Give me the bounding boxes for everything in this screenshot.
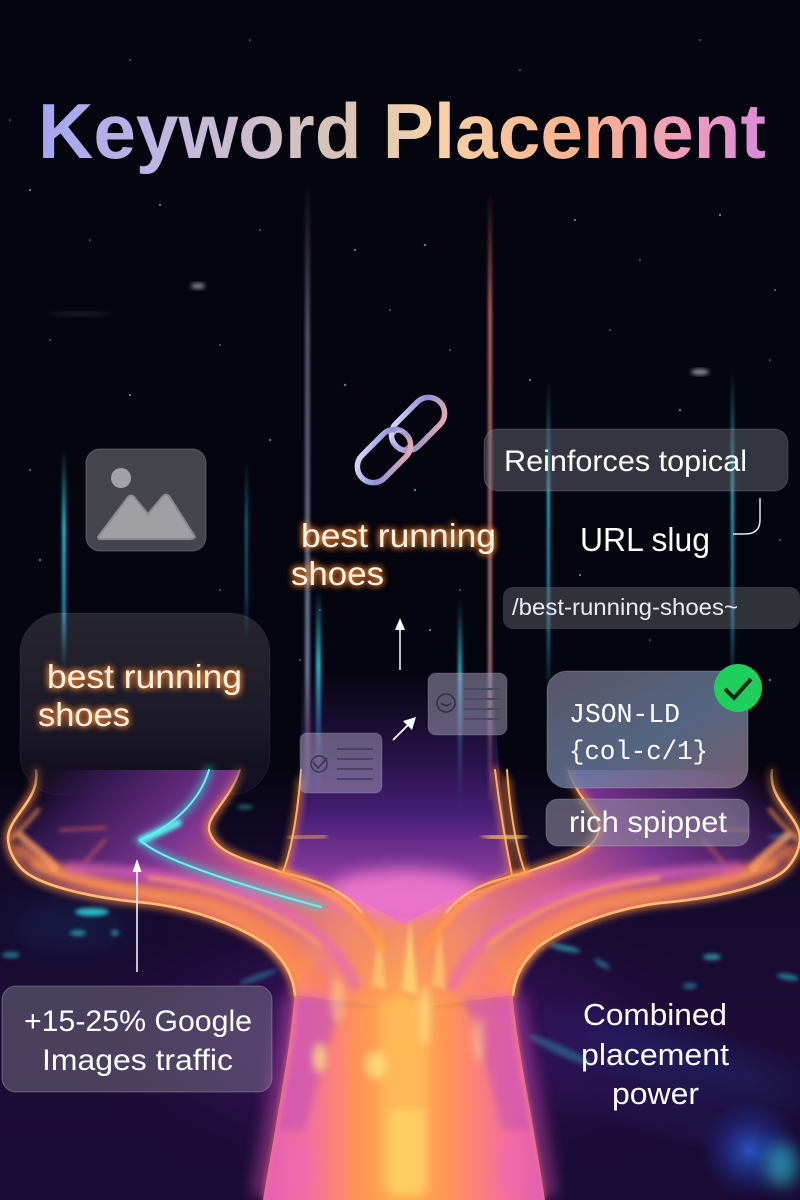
trunk outer glow — [263, 995, 545, 1198]
internal link anchor keyword: best running — [301, 517, 496, 554]
central column of the light tree — [283, 670, 510, 925]
panel: rich snippet label: rich spippet — [569, 806, 728, 839]
icon: chain link — [351, 391, 451, 489]
panel: JSON-LD structured data card: {col-c/1} — [569, 738, 708, 768]
internal link anchor keyword: shoes — [291, 555, 384, 592]
panel: rich snippet label — [546, 799, 749, 846]
arrow: between documents — [393, 717, 416, 740]
panel: Google Images traffic stat: Images traffic — [42, 1044, 233, 1077]
icon: document card lower — [300, 733, 382, 793]
alt text keyword: shoes — [38, 696, 130, 733]
right branch light strands — [425, 770, 800, 1198]
arrow: up to anchor keyword — [395, 618, 405, 670]
panel: URL slug bar — [503, 587, 800, 629]
cyan streaks — [2, 781, 799, 1187]
panel: image alt text card background — [20, 613, 270, 795]
cyan strands on left branch — [140, 770, 321, 907]
URL slug label: URL slug — [580, 521, 710, 558]
panel: JSON-LD structured data card: JSON-LD — [569, 701, 680, 731]
combined placement power caption: power — [612, 1076, 699, 1111]
title: Keyword Placement — [38, 87, 766, 175]
faint light flares — [50, 283, 709, 375]
left branch light strands — [8, 770, 383, 1198]
panel: Google Images traffic stat: +15-25% Google — [24, 1005, 252, 1038]
panel: reinforces topical: Reinforces topical — [504, 445, 747, 478]
icon: green check badge — [714, 664, 762, 712]
alt text keyword — [38, 658, 242, 733]
vertical light beams — [62, 180, 734, 820]
icon: document card upper — [428, 673, 507, 735]
trunk top flames — [372, 920, 446, 995]
starfield — [9, 39, 781, 681]
left branch of the light tree — [8, 770, 405, 1010]
combined placement power caption: Combined — [583, 997, 727, 1032]
panel: reinforces topical — [484, 429, 788, 491]
icon: image placeholder — [86, 449, 206, 551]
panel: JSON-LD structured data card — [547, 671, 748, 788]
combined placement power caption — [581, 997, 729, 1111]
connector line — [733, 498, 760, 534]
panel: URL slug bar: /best-running-shoes~ — [512, 594, 738, 620]
right branch of the light tree — [403, 770, 800, 1010]
alt text keyword: best running — [47, 658, 242, 695]
combined placement power caption: placement — [581, 1037, 729, 1072]
arrow: traffic up to image card — [132, 859, 142, 972]
pink glow at the junction — [327, 869, 483, 917]
internal link anchor keyword — [291, 517, 496, 592]
trunk of the light tree — [263, 915, 545, 1200]
trunk shading and highlights — [278, 978, 530, 1196]
panel: Google Images traffic stat — [2, 986, 272, 1092]
column right edge — [490, 770, 525, 875]
